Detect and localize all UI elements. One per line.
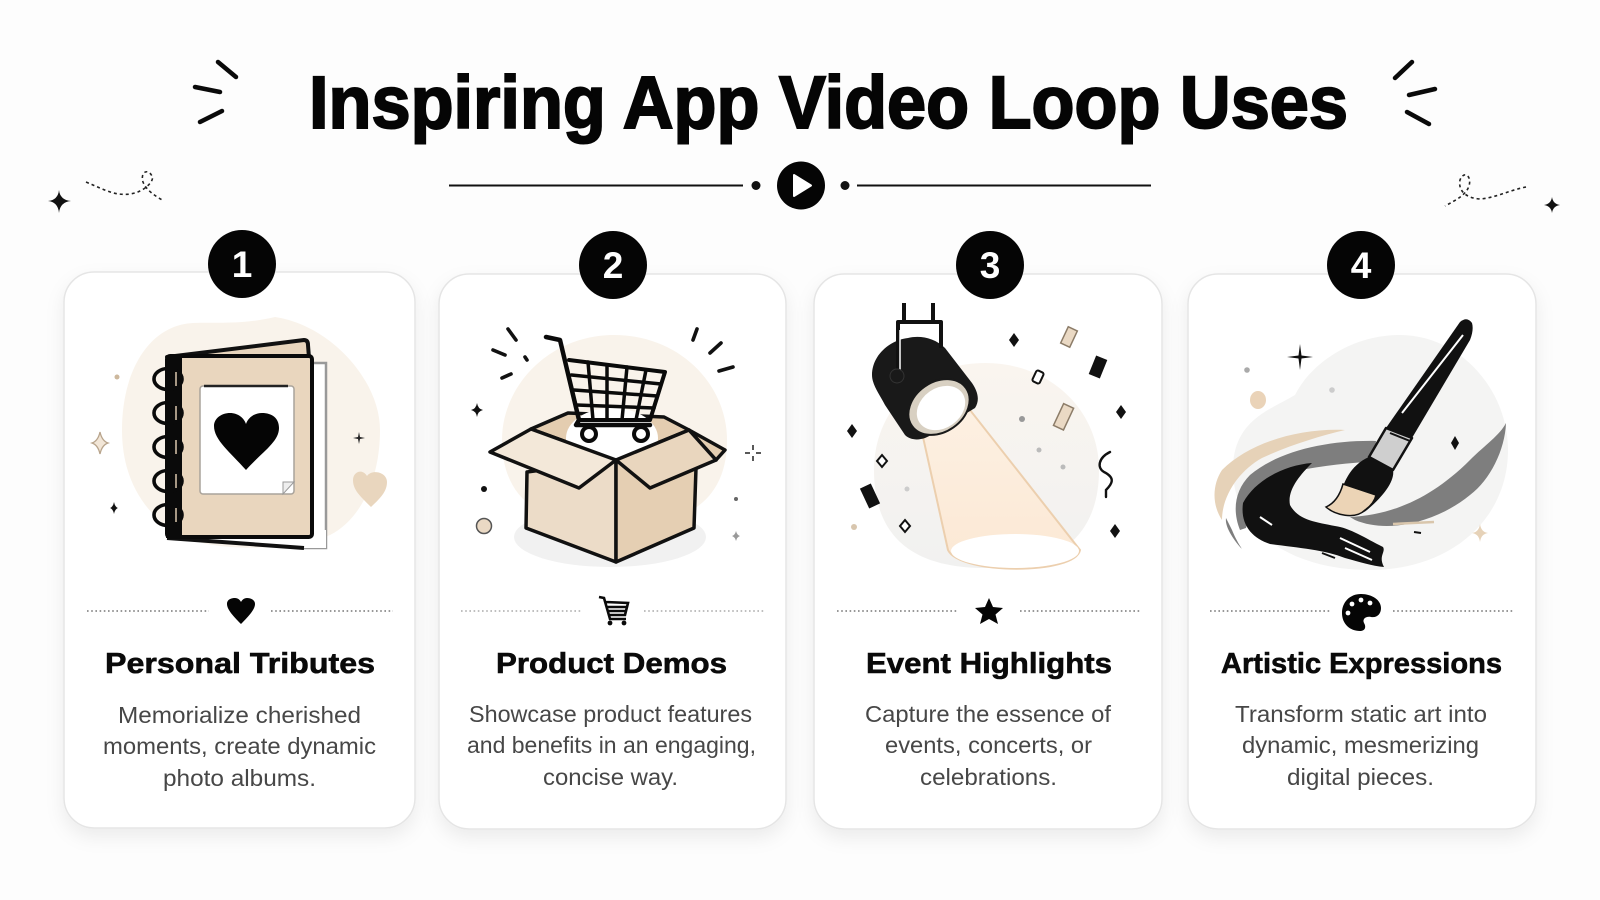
number badge 4: 4: [1351, 245, 1372, 286]
illustration: spotlight and confetti: [847, 303, 1126, 569]
description: events, concerts, or: [885, 732, 1092, 758]
number badge 2: [579, 231, 647, 299]
divider with heart icon: [87, 598, 393, 624]
description: dynamic, mesmerizing: [1242, 732, 1479, 758]
description: [103, 702, 376, 791]
description: [865, 701, 1111, 790]
number badge 4: [1327, 231, 1395, 299]
description: Memorialize cherished: [118, 702, 361, 728]
illustration: photo album: [92, 317, 387, 548]
card 4 background: [1188, 274, 1536, 829]
panel: product demos: [439, 231, 786, 829]
description: Transform static art into: [1235, 701, 1487, 727]
description: and benefits in an engaging,: [467, 732, 756, 758]
number badge 3: 3: [980, 245, 1000, 286]
card 2 background: [439, 274, 786, 829]
illustration: cart in box: [471, 329, 761, 567]
description: Showcase product features: [469, 701, 752, 727]
header divider with play button: [449, 162, 1151, 210]
panel: personal tributes: [64, 230, 415, 828]
decoration: right sparkle and dotted path: [1445, 175, 1560, 213]
divider with cart icon: [461, 597, 764, 625]
title: Inspiring App Video Loop Uses: [309, 61, 1348, 144]
number badge 1: 1: [232, 244, 252, 285]
divider with star icon: [837, 598, 1141, 624]
heading: Product Demos: [496, 648, 727, 680]
description: moments, create dynamic: [103, 733, 376, 759]
divider with palette icon: [1210, 594, 1514, 631]
heading: Personal Tributes: [105, 648, 375, 680]
description: Capture the essence of: [865, 701, 1111, 727]
number badge 3: [956, 231, 1024, 299]
card 3 background: [814, 274, 1162, 829]
description: concise way.: [543, 764, 678, 790]
description: [1235, 701, 1487, 790]
description: [467, 701, 756, 790]
decoration: left sparkle and dotted path: [48, 172, 164, 213]
number badge 2: 2: [603, 245, 623, 286]
number badge 1: [208, 230, 276, 298]
card 1 background: [64, 272, 415, 828]
description: digital pieces.: [1287, 764, 1434, 790]
heading: Artistic Expressions: [1221, 648, 1502, 680]
illustration: paint brush and strokes: [1214, 319, 1508, 570]
title burst left: [195, 62, 236, 122]
panel: event highlights: [814, 231, 1162, 829]
heading: Event Highlights: [866, 648, 1112, 680]
panel: artistic expressions: [1188, 231, 1536, 829]
description: photo albums.: [163, 765, 316, 791]
description: celebrations.: [920, 764, 1057, 790]
title burst right: [1395, 62, 1435, 124]
